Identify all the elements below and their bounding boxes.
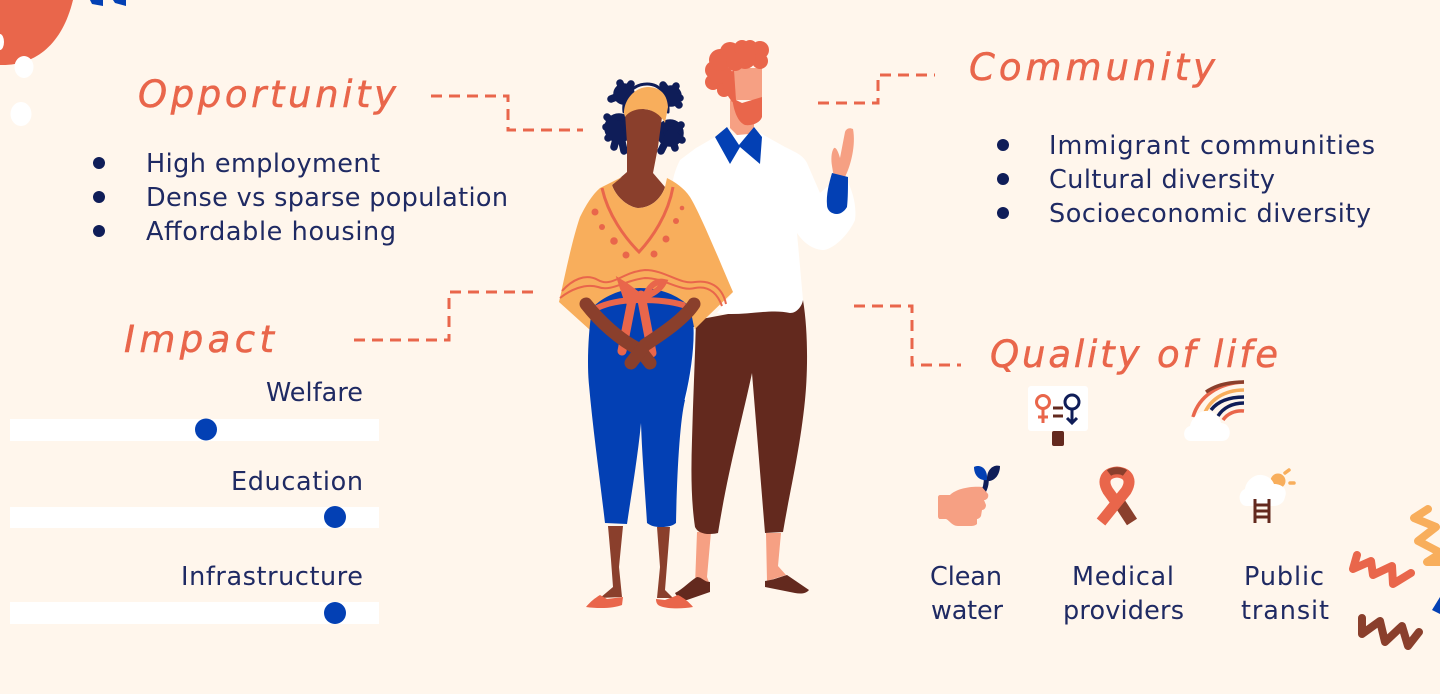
man [672,40,855,600]
heading: Community: Community [969,46,1216,89]
list: Community: Socioeconomic diversity [1049,199,1371,229]
dashed connector: Impact [354,292,537,340]
list: Opportunity [93,149,508,247]
dashed connector: Community [818,75,935,103]
icon: awareness ribbon [1101,471,1132,522]
slider: Education: Education [231,467,363,497]
slider: Infrastructure [10,562,379,624]
label: Public transit [1241,562,1329,626]
slider: Welfare [10,378,379,441]
icon: rainbow and cloud [1184,382,1244,441]
slider: Education [10,467,379,528]
icon: cloud with sun and ladder [1240,470,1294,523]
label: Medical providers: Medical [1072,562,1174,592]
label: Public transit: transit [1241,596,1329,626]
dashed connector: Opportunity [431,96,583,130]
list: Opportunity: Dense vs sparse population [146,183,508,213]
label: Medical providers [1063,562,1184,626]
icon: hand holding seedling [938,466,1000,526]
illustration: man and woman [559,40,855,608]
label: Public transit: Public [1244,562,1324,592]
decoration: top-left balloon and dots [0,0,126,126]
decoration: squiggles bottom right [1353,509,1440,646]
slider: Welfare: Welfare [266,378,363,408]
label: Clean water [930,562,1004,626]
heading: Impact: Impact [124,318,275,361]
list: Opportunity: High employment [146,149,380,179]
list: Community: Cultural diversity [1049,165,1275,195]
heading: Opportunity: Opportunity [138,73,397,116]
woman [559,83,733,608]
list: Community: Immigrant communities [1049,131,1375,161]
heading: Quality of life: Quality of life [990,333,1278,376]
slider: Infrastructure: Infrastructure [181,562,363,592]
list: Opportunity: Affordable housing [146,217,396,247]
label: Clean water: Clean [930,562,1002,592]
label: Medical providers: providers [1063,596,1184,626]
icon: gender equality sign [1028,386,1088,446]
label: Clean water: water [931,596,1004,626]
dashed connector: Quality of life [854,306,961,365]
list: Community [997,131,1375,229]
